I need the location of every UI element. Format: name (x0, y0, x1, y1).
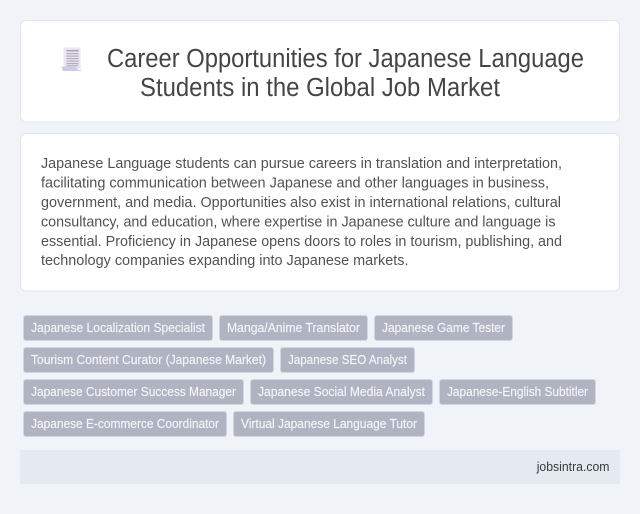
tag: Japanese Social Media Analyst (250, 380, 432, 404)
heading: title: Career Opportunities for Japanese Language (107, 45, 584, 73)
footer: source text: jobsintra.com (536, 460, 610, 474)
text block: description: consultancy, and education, where expertise in Japanese culture and language is (41, 215, 556, 231)
heading: title (107, 45, 584, 102)
panel: description (20, 134, 620, 291)
tag: Japanese E-commerce Coordinator: Japanese E-commerce Coordinator (31, 417, 219, 431)
tag: Japanese Localization Specialist: Japanese Localization Specialist (31, 321, 205, 335)
tag: Japanese-English Subtitler: Japanese-English Subtitler (447, 385, 588, 399)
tag: Manga/Anime Translator (220, 316, 368, 340)
tag: Japanese Game Tester: Japanese Game Tester (382, 321, 505, 335)
tag: Japanese Customer Success Manager: Japanese Customer Success Manager (31, 385, 236, 399)
text block: description: facilitating communication between Japanese and other languages in business, (41, 176, 549, 192)
tag: Japanese E-commerce Coordinator (24, 412, 226, 436)
tag: Japanese SEO Analyst: Japanese SEO Analyst (288, 353, 407, 367)
text block: description: Japanese Language students can pursue careers in translation and interpretation, (41, 156, 562, 172)
tag: Japanese Localization Specialist (24, 316, 212, 340)
tag: Virtual Japanese Language Tutor: Virtual Japanese Language Tutor (241, 417, 417, 431)
heading: title: Students in the Global Job Market (140, 74, 500, 102)
tag: Japanese Social Media Analyst: Japanese Social Media Analyst (258, 385, 425, 399)
tag: Virtual Japanese Language Tutor (234, 412, 424, 436)
icon: paper scroll (62, 48, 81, 71)
tag: Japanese SEO Analyst (280, 348, 414, 372)
tag: Japanese-English Subtitler (440, 380, 596, 404)
tag list: job titles (24, 316, 596, 436)
text block: description: essential. Proficiency in Japanese opens doors to roles in tourism, publishing, and (41, 234, 562, 250)
text block: description: government, and media. Opportunities also exist in international relations, cultural (41, 195, 561, 211)
text block: description: technology companies expanding into Japanese markets. (41, 253, 408, 269)
panel: title card (20, 20, 620, 122)
tag: Manga/Anime Translator: Manga/Anime Translator (227, 321, 360, 335)
tag: Tourism Content Curator (24, 348, 274, 372)
tag: Tourism Content Curator: Tourism Content Curator (Japanese Market) (31, 353, 266, 367)
tag: Japanese Customer Success Manager (24, 380, 244, 404)
text block: description (41, 156, 562, 269)
footer bar (20, 450, 620, 484)
tag: Japanese Game Tester (374, 316, 512, 340)
